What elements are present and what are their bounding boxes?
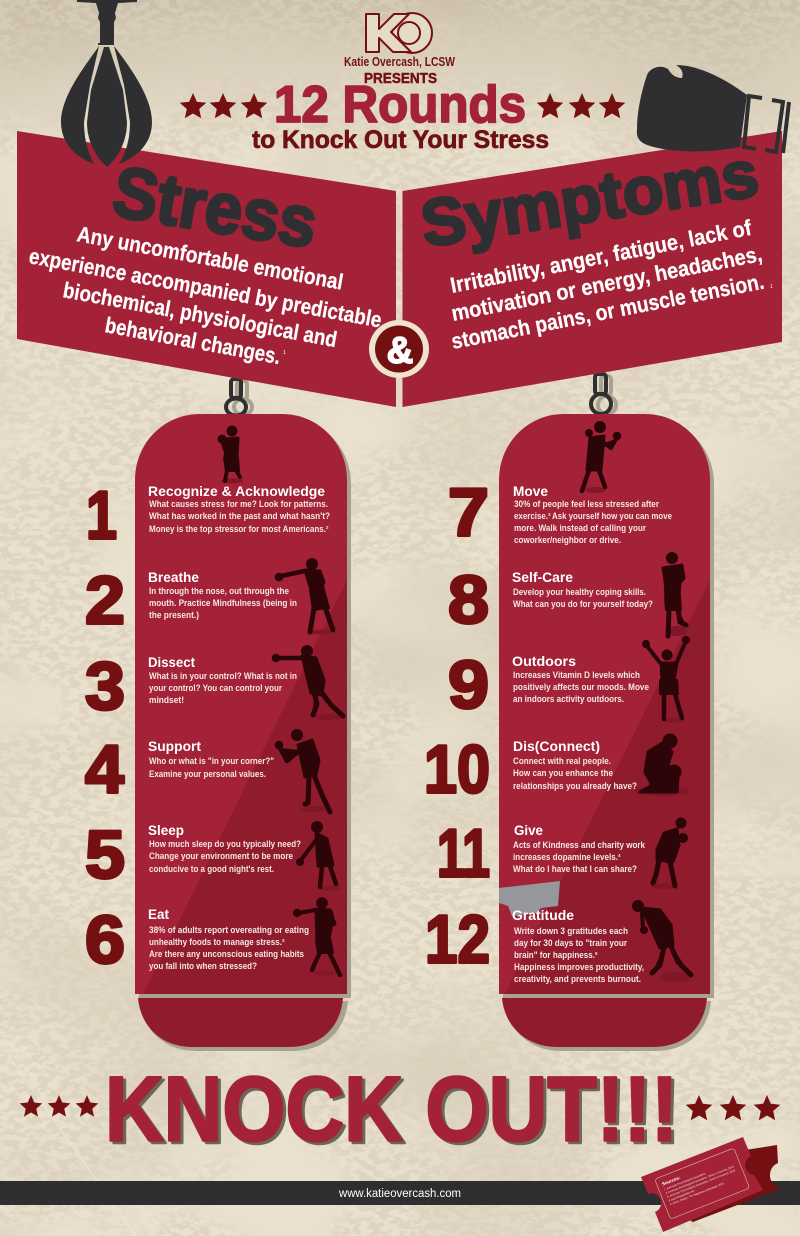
- body: [513, 670, 649, 705]
- boxer silhouette: [642, 636, 690, 722]
- body: [149, 499, 330, 535]
- knock out headline: KNOCK OUT!!!: [105, 1058, 678, 1160]
- body: Examine your personal values.: [149, 769, 266, 780]
- number 11: 11: [437, 816, 490, 892]
- heading: Recognize & Acknowledge: [148, 483, 325, 499]
- stars: knock out left: [20, 1095, 98, 1117]
- body: What causes stress for me? Look for patterns.: [149, 499, 328, 510]
- number 4: 4: [85, 732, 124, 808]
- boxer silhouette: [632, 900, 691, 982]
- heading: Breathe: [148, 569, 199, 585]
- body: [514, 499, 672, 546]
- ticket: sources: 1. American Psychological Association: [663, 1171, 706, 1191]
- boxer silhouette: [663, 552, 687, 636]
- step 11: [437, 816, 688, 892]
- heading: Symptoms: Symptoms: [416, 136, 763, 261]
- body: [513, 587, 653, 610]
- body: mindset!: [149, 695, 184, 706]
- left banner: Stress: [17, 131, 396, 407]
- body: Money is the top stressor for most Americans.: [149, 524, 326, 535]
- ticket: sources: 4. psychologytoday.com: [668, 1189, 695, 1202]
- step 3: [85, 646, 343, 724]
- stars: title right: [537, 93, 625, 118]
- stars: title left: [180, 93, 267, 118]
- text: stress definition: 1: [283, 350, 286, 356]
- text: stress definition: Any uncomfortable emotional: [75, 221, 345, 295]
- body: Acts of Kindness and charity work: [513, 840, 646, 851]
- heading: Move: [513, 483, 548, 499]
- body: more. Walk instead of calling your: [514, 523, 646, 534]
- body: 2: [326, 525, 329, 530]
- text: presenter: Katie Overcash, LCSW: [344, 55, 455, 69]
- body: 5: [595, 951, 598, 956]
- title: 12 Rounds: [274, 76, 526, 134]
- body: Connect with real people.: [513, 756, 611, 767]
- body: positively affects our moods. Move: [513, 682, 649, 693]
- ampersand badge: &: [387, 330, 413, 371]
- text: stress definition: [27, 221, 384, 369]
- boxer silhouette: [296, 822, 341, 890]
- body: [149, 671, 297, 706]
- step 12: [425, 900, 691, 985]
- step 8: [448, 552, 687, 638]
- chain: left: [226, 379, 252, 416]
- boxer silhouette: [275, 730, 330, 812]
- boxer silhouette: [272, 646, 343, 720]
- body: [514, 926, 644, 985]
- body: What has worked in the past and what hasn't?: [149, 511, 330, 522]
- body: mouth. Practice Mindfulness (being in: [149, 598, 297, 609]
- boxer silhouette: [651, 818, 688, 889]
- knock out headline: KNOCK OUT!!!: [108, 1061, 681, 1163]
- body: Change your environment to be more: [149, 851, 293, 862]
- number 12: 12: [425, 902, 490, 978]
- body: creativity, and prevents burnout.: [514, 974, 641, 985]
- heading: Sleep: [148, 822, 184, 838]
- number 10: 10: [424, 732, 490, 808]
- body: you fall into when stressed?: [149, 961, 257, 972]
- body: day for 30 days to "train your: [514, 938, 627, 949]
- body: 3: [282, 938, 285, 943]
- punching bag: left: [135, 414, 351, 1051]
- body: In through the nose, out through the: [149, 586, 289, 597]
- step 1: [86, 426, 330, 554]
- step 5: [85, 817, 341, 893]
- footer bar: [0, 1181, 800, 1205]
- heading: Gratitude: [512, 907, 574, 923]
- body: [513, 756, 637, 792]
- icon: speed bag: [61, 0, 152, 167]
- logo: KO: [366, 13, 432, 53]
- body: Write down 3 gratitudes each: [514, 926, 628, 937]
- body: Ask yourself how you can move: [552, 511, 672, 522]
- body: increases dopamine levels.: [513, 852, 618, 863]
- body: 38% of adults report overeating or eating: [149, 925, 309, 936]
- boxer silhouette: [582, 422, 621, 493]
- body: Happiness improves productivity,: [514, 962, 644, 973]
- body: an indoors activity outdoors.: [513, 694, 624, 705]
- ticket: sources: 3. American Psychological Association, Stress in America, 2013: [666, 1168, 736, 1199]
- body: conducive to a good night's rest.: [149, 864, 274, 875]
- body: How can you enhance the: [513, 768, 613, 779]
- body: Develop your healthy coping skills.: [513, 587, 646, 598]
- body: brain" for happiness.: [514, 950, 595, 961]
- number 7: 7: [448, 474, 489, 550]
- body: relationships you already have?: [513, 781, 637, 792]
- ampersand badge: [369, 320, 429, 378]
- boxer silhouette: [275, 558, 333, 634]
- text: symptoms list: stomach pains, or muscle tension.: [449, 269, 766, 354]
- number 5: 5: [85, 817, 125, 893]
- step 9: [448, 636, 690, 723]
- body: Are there any unconscious eating habits: [149, 949, 304, 960]
- step 4: [85, 730, 330, 812]
- body: Who or what is "in your corner?": [149, 756, 274, 767]
- text: stress definition: experience accompanied by predictable: [27, 243, 384, 333]
- number 9: 9: [448, 647, 489, 723]
- body: What can you do for yourself today?: [513, 599, 653, 610]
- body: [513, 840, 646, 875]
- body: [149, 586, 297, 621]
- ticket: sources: Sources:: [661, 1175, 681, 1187]
- number 6: 6: [85, 902, 125, 978]
- heading: Support: [148, 738, 201, 754]
- ticket: sources: 5. Achor, Shawn. The Happiness Advantage, 2010: [669, 1181, 725, 1206]
- heading: Dissect: [148, 654, 195, 670]
- body: your control? You can control your: [149, 683, 282, 694]
- heading: Outdoors: [512, 653, 576, 669]
- heading: Give: [514, 822, 543, 838]
- step 10: [424, 732, 689, 808]
- ticket: sources: [641, 1137, 782, 1232]
- body: coworker/neighbor or drive.: [514, 535, 621, 546]
- body: 4: [618, 853, 621, 858]
- step 6: [85, 898, 340, 978]
- website url: www.katieovercash.com: [338, 1188, 461, 1200]
- icon: boxing glove: [637, 65, 789, 153]
- text: symptoms list: [448, 215, 773, 354]
- text: symptoms list: motivation or energy, headaches,: [449, 241, 764, 326]
- body: 30% of people feel less stressed after: [514, 499, 659, 510]
- chain: right: [591, 374, 616, 414]
- body: Increases Vitamin D levels which: [513, 670, 640, 681]
- body: What do I have that I can share?: [513, 864, 637, 875]
- body: [149, 756, 274, 780]
- boxer silhouette: [293, 898, 340, 976]
- text: stress definition: biochemical, physiological and: [61, 277, 339, 352]
- body: exercise.: [514, 511, 548, 522]
- heading: Self-Care: [512, 569, 573, 585]
- body: [149, 839, 301, 875]
- heading: Eat: [148, 906, 169, 922]
- right banner: Symptoms: [402, 131, 782, 407]
- number 1: 1: [86, 478, 117, 554]
- text: stress definition: behavioral changes.: [103, 312, 283, 369]
- body: What is in your control? What is not in: [149, 671, 297, 682]
- punching bag: right: [499, 414, 714, 1051]
- duct tape: [499, 881, 560, 916]
- body: How much sleep do you typically need?: [149, 839, 301, 850]
- heading: Dis(Connect): [513, 738, 600, 754]
- step 2: [85, 558, 333, 638]
- body: the present.): [149, 610, 199, 621]
- body: [149, 925, 309, 972]
- heading: Stress: Stress: [107, 152, 323, 264]
- number 8: 8: [448, 562, 489, 638]
- text: presents: PRESENTS: [364, 71, 437, 87]
- ticket: sources: 2. American Psychological Association, Stress in America, 2015: [665, 1164, 735, 1195]
- step 7: [448, 422, 672, 550]
- subtitle: to Knock Out Your Stress: [252, 126, 549, 154]
- number 2: 2: [85, 562, 125, 638]
- body: 3: [548, 512, 551, 517]
- number 3: 3: [85, 648, 125, 724]
- text: symptoms list: 1: [770, 284, 773, 290]
- stars: knock out right: [686, 1095, 780, 1120]
- boxer silhouette: [218, 426, 243, 484]
- kneeling silhouette: [635, 734, 689, 796]
- text: symptoms list: Irritability, anger, fatigue, lack of: [448, 215, 754, 298]
- body: unhealthy foods to manage stress.: [149, 937, 282, 948]
